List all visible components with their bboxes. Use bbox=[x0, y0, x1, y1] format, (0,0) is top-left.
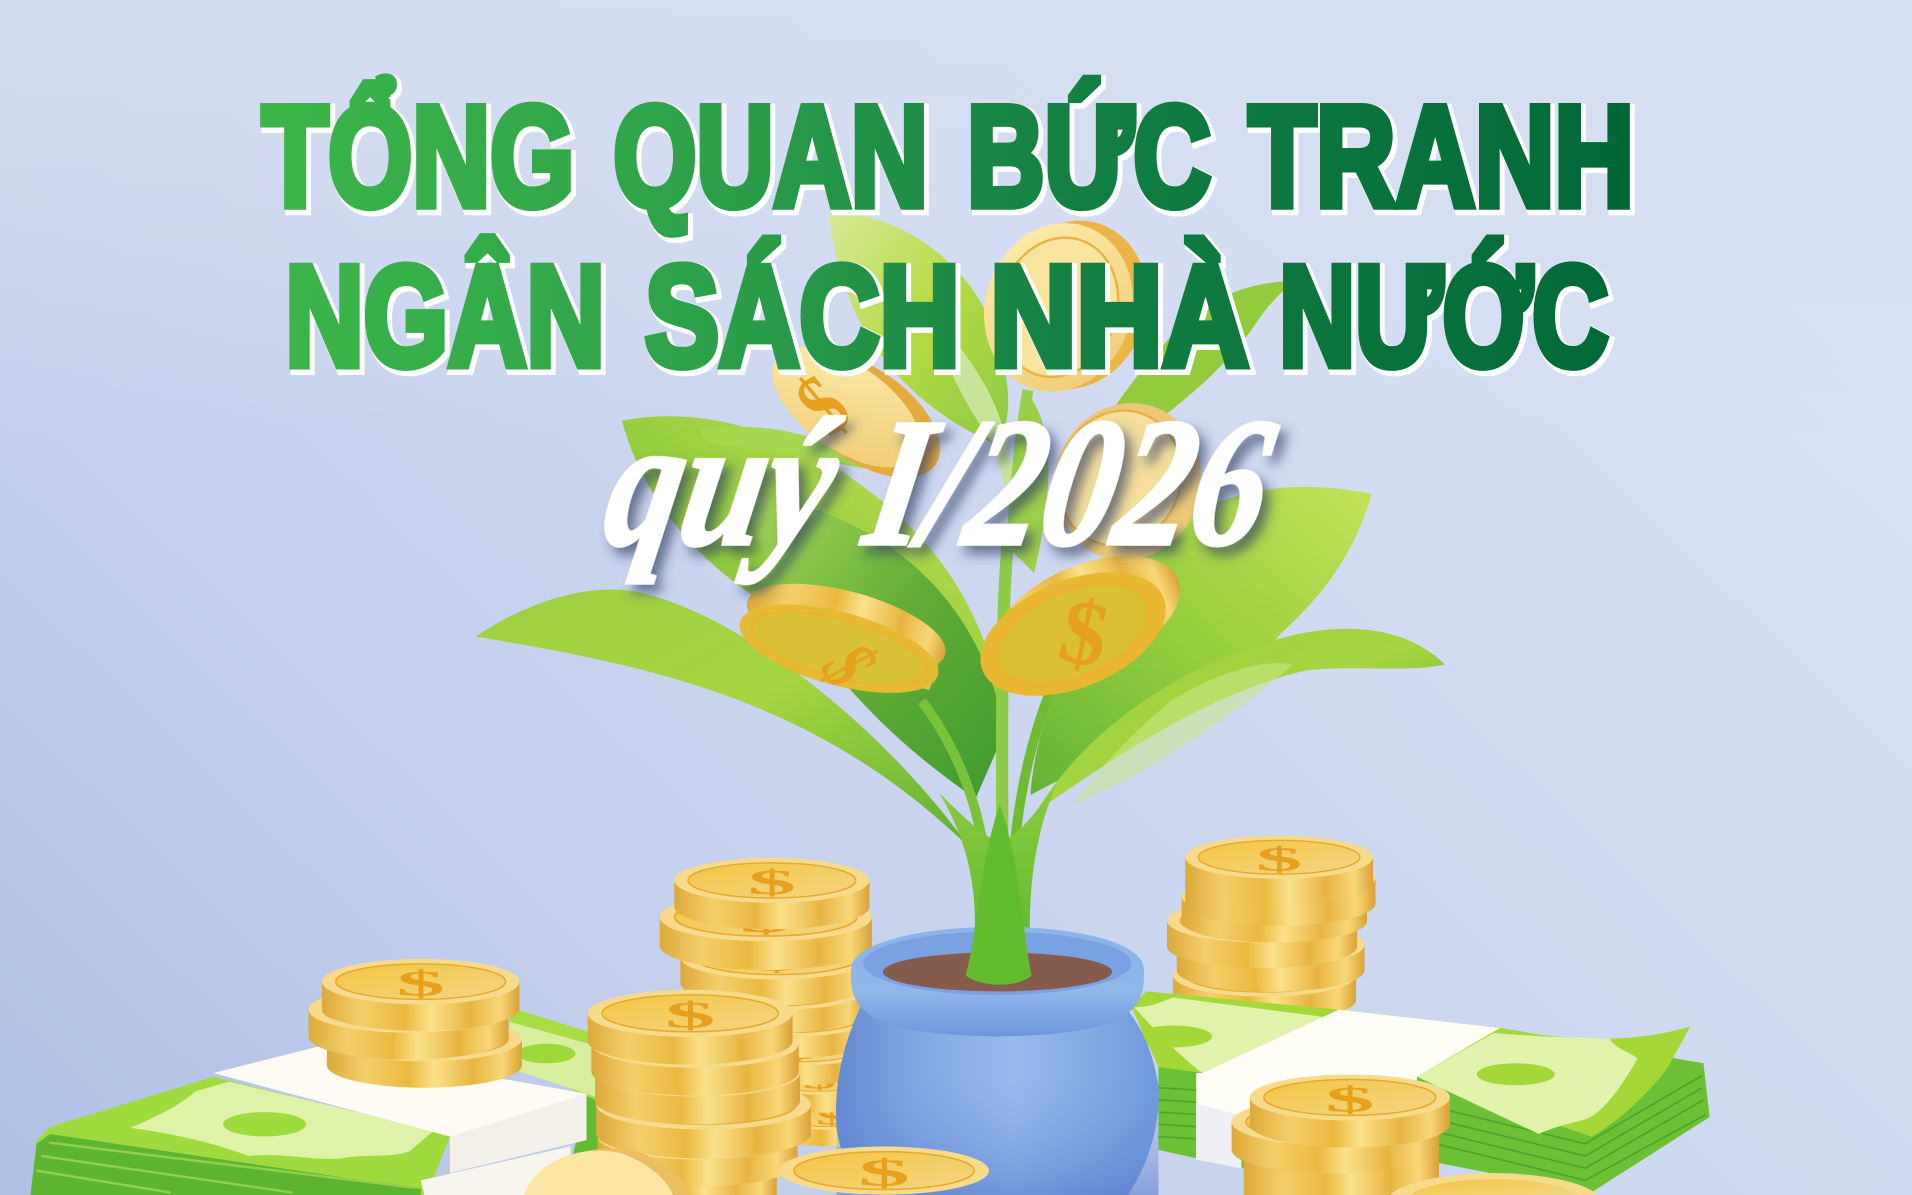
back coin stack: left of pot bbox=[660, 858, 893, 1146]
title: NƯỚC bbox=[1279, 237, 1608, 396]
floating coin: lower left: $ bbox=[803, 633, 895, 699]
title: QUAN bbox=[616, 81, 931, 240]
title: TỔNG bbox=[265, 80, 577, 240]
cash stack: right bbox=[1132, 991, 1710, 1193]
coin stack: right front bbox=[1232, 1074, 1450, 1195]
floating coin: top bbox=[962, 201, 1169, 411]
leaning coin bbox=[524, 1149, 690, 1195]
title bbox=[262, 76, 1637, 399]
title: BỨC bbox=[970, 81, 1214, 240]
plant leaves and stems bbox=[476, 213, 1445, 983]
title: NGÂN bbox=[288, 240, 608, 399]
cash stack: left bbox=[30, 1007, 606, 1195]
plant trunk in pot bbox=[966, 805, 1032, 985]
title: TRANH bbox=[1249, 77, 1634, 236]
floating coin: lower left bbox=[731, 566, 955, 711]
floating coin: left bbox=[752, 323, 962, 503]
title: NHÀ bbox=[990, 237, 1249, 396]
floating coin: right bbox=[1032, 382, 1224, 581]
title: QUAN bbox=[613, 77, 928, 236]
floating coin: lower right bbox=[963, 532, 1197, 720]
pot bbox=[836, 927, 1159, 1195]
coin stack: centre front bbox=[588, 990, 811, 1195]
back coin stack: right of pot bbox=[1167, 836, 1375, 1021]
floating coin: lower right: $ bbox=[1051, 578, 1118, 689]
title: SÁCH bbox=[645, 237, 960, 396]
title: BỨC bbox=[967, 77, 1211, 236]
title: NGÂN bbox=[285, 237, 605, 396]
title: NƯỚC bbox=[1282, 240, 1611, 399]
coin: bottom right bbox=[1390, 1173, 1597, 1195]
title: TRANH bbox=[1252, 81, 1637, 240]
floating coin: left: $ bbox=[778, 357, 868, 455]
coin: bottom centre bbox=[779, 1146, 989, 1195]
soil bbox=[883, 952, 1112, 991]
title: NHÀ bbox=[993, 240, 1252, 399]
title: TỔNG bbox=[262, 76, 574, 236]
title: SÁCH bbox=[648, 240, 963, 399]
subtitle: quý I/2026 bbox=[593, 381, 1288, 585]
coin stack: far left bbox=[309, 959, 522, 1088]
